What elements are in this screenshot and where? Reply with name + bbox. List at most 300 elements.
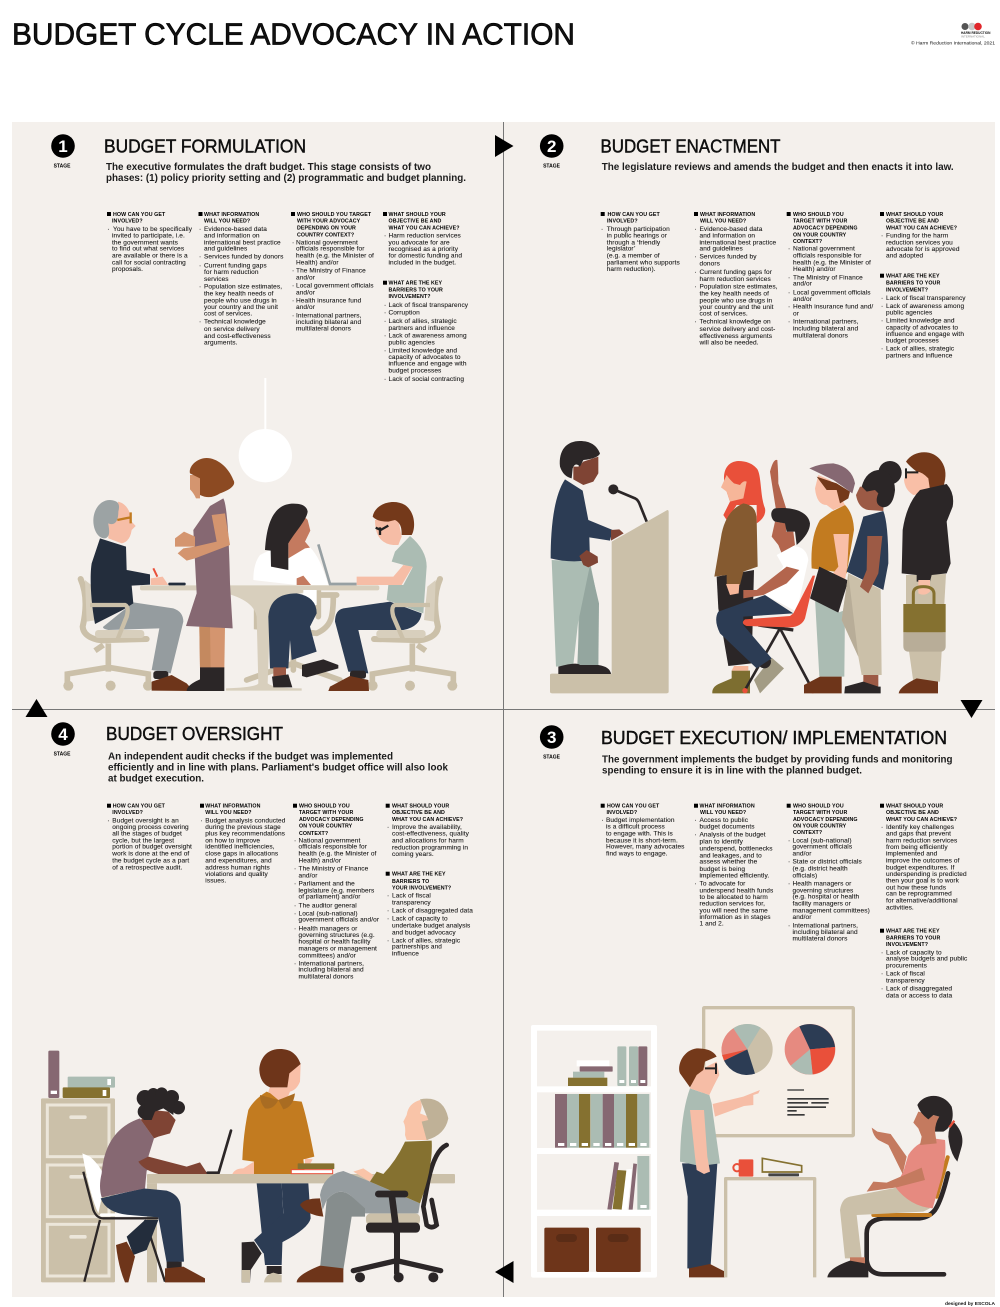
- column: objective and barriers: ·: [881, 950, 883, 957]
- column: who should you target: or: [793, 310, 800, 317]
- intro text: at budget execution.: [108, 773, 204, 784]
- column: how can you get involved: However, many advocates: [606, 844, 685, 851]
- column: who should you target: [291, 212, 374, 333]
- column: objective and barriers: Lack of fiscal transparency: [388, 302, 469, 309]
- column: who should you target: COUNTRY CONTEXT?: [297, 232, 354, 238]
- column: who should you target: governing structures (e.g.: [298, 932, 375, 939]
- books on table: [291, 1163, 334, 1174]
- column: objective and barriers: and gaps that prevent: [886, 831, 951, 838]
- column: objective and barriers: influence and engage with: [886, 331, 964, 338]
- column: objective and barriers: Lack of allies, strategic: [392, 938, 461, 945]
- laptop: [318, 544, 357, 584]
- column: what information: ·: [694, 284, 697, 291]
- column: what information: WILL YOU NEED?: [205, 810, 252, 816]
- column: who should you target: ·: [788, 859, 790, 866]
- column: objective and barriers: for domestic funding and: [388, 253, 462, 260]
- column: objective and barriers: reduction programming in: [392, 845, 468, 852]
- column: objective and barriers: WHAT SHOULD YOUR: [392, 804, 449, 810]
- column: what information: Technical knowledge: [204, 319, 266, 326]
- column: who should you target: management committees): [792, 908, 870, 915]
- column: who should you target: International partners,: [793, 319, 859, 326]
- column: objective and barriers: ·: [387, 916, 389, 923]
- column: who should you target: including bilateral and: [792, 929, 858, 936]
- column: how can you get involved: to find out what services: [112, 246, 185, 253]
- column: who should you target: Local government officials: [296, 283, 374, 290]
- column: objective and barriers: from being efficiently: [886, 844, 948, 851]
- column: objective and barriers: [383, 212, 469, 383]
- column: who should you target: CONTEXT?: [299, 831, 328, 837]
- column: who should you target: Health) and/or: [296, 260, 339, 267]
- chair armrest overlay: [392, 605, 430, 640]
- column: who should you target: National government: [296, 240, 358, 247]
- column: what information: reduction services for,: [700, 901, 765, 908]
- column: objective and barriers: OBJECTIVE BE AND: [886, 219, 939, 225]
- person: seated woman with ponytail: [827, 1096, 962, 1277]
- middle chair: [247, 590, 340, 680]
- stage 3 badge: STAGE: [543, 754, 561, 760]
- column: how can you get involved: ·: [107, 818, 110, 825]
- column: what information: international best practice: [204, 239, 281, 246]
- column: who should you target: officials responsible for: [793, 253, 862, 260]
- column: what information: your country and the unit: [700, 304, 774, 311]
- column: objective and barriers: INVOLVEMENT?: [388, 294, 431, 300]
- column: who should you target: ON YOUR COUNTRY: [793, 824, 847, 830]
- column: objective and barriers: for alternative/additional: [886, 898, 958, 905]
- podium: [550, 510, 669, 693]
- column: who should you target: ·: [294, 911, 296, 918]
- right chair: [368, 579, 457, 691]
- column: objective and barriers: coming years.: [392, 851, 434, 858]
- column: who should you target: ·: [788, 246, 790, 253]
- column: objective and barriers: Lack of fiscal: [392, 893, 431, 900]
- column: objective and barriers: WHAT ARE THE KEY: [388, 281, 443, 287]
- column: what information: ·: [199, 254, 201, 261]
- column: objective and barriers: partners and influence: [388, 325, 455, 332]
- column: what information: violations and quality: [205, 871, 268, 878]
- column: objective and barriers: Lack of social contracting: [388, 376, 464, 383]
- heading: BUDGET OVERSIGHT: [106, 724, 283, 744]
- column: what information: implemented efficiently.: [700, 873, 769, 880]
- column: objective and barriers: ·: [881, 824, 883, 831]
- column: objective and barriers: and adopted: [886, 253, 924, 260]
- column: objective and barriers: can be reprogrammed: [886, 891, 952, 898]
- column: objective and barriers: Identify key challenges: [886, 824, 955, 831]
- column: who should you target: Health managers or: [792, 881, 852, 888]
- column: what information: 1 and 2.: [700, 921, 724, 928]
- column: who should you target: CONTEXT?: [793, 830, 822, 836]
- column: who should you target: health (e.g. the Minister of: [298, 851, 377, 858]
- column: objective and barriers: ·: [384, 376, 386, 383]
- illustration: public hearing with legislators and advocates: [550, 441, 953, 693]
- column: how can you get involved: to engage with. This is: [606, 831, 674, 838]
- logo and copyright: HARM REDUCTION: [961, 31, 991, 35]
- column: what information: people who use drugs in: [700, 297, 773, 304]
- column: objective and barriers: ·: [387, 824, 389, 831]
- column: what information: WHAT INFORMATION: [700, 804, 755, 810]
- person: curly-haired man at laptop: [100, 1087, 208, 1282]
- column: objective and barriers: underspending is predicted: [886, 871, 967, 878]
- storage boxes: [544, 1228, 641, 1272]
- column: objective and barriers: WHAT YOU CAN ACHIEVE?: [886, 226, 957, 232]
- column: objective and barriers: ·: [881, 971, 883, 978]
- person: man in hoodie with bag: [899, 452, 953, 693]
- column: objective and barriers: WHAT ARE THE KEY: [886, 274, 940, 280]
- column: how can you get involved: [601, 212, 680, 273]
- column: who should you target: and/or: [296, 304, 316, 311]
- column: who should you target: Local (sub-national): [298, 911, 358, 918]
- column: who should you target: Health insurance fund: [296, 298, 362, 305]
- column: who should you target: and/or: [792, 851, 812, 858]
- column: objective and barriers: WHAT SHOULD YOUR: [388, 212, 446, 218]
- column: objective and barriers: WHAT SHOULD YOUR: [886, 212, 943, 218]
- column: objective and barriers: YOUR INVOLVEMENT?: [392, 886, 451, 892]
- column: who should you target: National government: [298, 838, 360, 845]
- column: who should you target: ·: [294, 961, 296, 968]
- column: how can you get involved: parliament who supports: [607, 259, 680, 266]
- column: how can you get involved: Budget oversight is an: [112, 818, 179, 825]
- column: what information: arguments.: [204, 339, 238, 346]
- column: what information: and information on: [204, 233, 260, 240]
- column: objective and barriers: implemented and: [886, 851, 938, 858]
- column: objective and barriers: harm reduction services: [886, 838, 958, 845]
- column: what information: ·: [199, 263, 201, 270]
- column: what information: and guidelines: [204, 246, 248, 253]
- column: who should you target: Health) and/or: [298, 858, 342, 865]
- column: what information: Current funding gaps for: [700, 269, 773, 276]
- arrow: stage 4 to 1: [26, 699, 48, 717]
- column: how can you get involved: all the stages of budget: [112, 831, 182, 838]
- column: objective and barriers: ·: [384, 348, 386, 355]
- column: how can you get involved: cycle, but the largest: [112, 838, 174, 845]
- arrow: stage 2 to 3: [960, 700, 982, 718]
- whiteboard with pie charts: [704, 1008, 853, 1136]
- column: how can you get involved: in public hearings or: [607, 233, 668, 240]
- illustration: oversight desk scene: [41, 1049, 455, 1282]
- column: what information: the key health needs of: [204, 291, 274, 298]
- left chair: [63, 579, 153, 691]
- column: who should you target: TARGET WITH YOUR: [793, 810, 847, 816]
- column: what information: issues.: [205, 878, 226, 885]
- column: objective and barriers: BARRIERS TO YOUR: [388, 287, 443, 293]
- column: what information: [198, 212, 284, 346]
- column: objective and barriers: transparency: [392, 900, 431, 907]
- person: man with grey hair: [91, 500, 191, 691]
- intro text: The legislature reviews and amends the budget and then enacts it into law.: [602, 162, 954, 173]
- column: who should you target: Local (sub-national): [792, 838, 852, 845]
- column: objective and barriers: Lack of capacity to: [392, 916, 448, 923]
- column: what information: service delivery and cost-: [700, 326, 775, 333]
- column: what information: Services funded by: [700, 254, 757, 261]
- column: who should you target: of parliament) and/or: [298, 894, 361, 901]
- bookshelf: [531, 1025, 657, 1278]
- column: what information: ·: [200, 818, 203, 825]
- column: objective and barriers: [880, 804, 968, 1000]
- folder on desk: [762, 1158, 802, 1176]
- column: who should you target: WHO SHOULD YOU TARGET: [297, 212, 372, 218]
- column: who should you target: and/or: [296, 275, 316, 282]
- illustration: team meeting around a table: [63, 378, 457, 691]
- stage 2 badge: STAGE: [543, 164, 561, 170]
- column: objective and barriers: Lack of awareness among: [388, 333, 467, 340]
- column: what information: ·: [694, 319, 697, 326]
- column: what information: ·: [199, 284, 201, 291]
- column: what information: for harm reduction: [204, 269, 259, 276]
- column: who should you target: and/or: [298, 873, 318, 880]
- column: who should you target: ·: [294, 903, 296, 910]
- column: objective and barriers: ·: [384, 310, 386, 317]
- column: how can you get involved: invited to participate, i.e.: [112, 233, 185, 240]
- column: what information: on how to improve: [205, 838, 260, 845]
- laptop: [208, 1131, 231, 1173]
- column: who should you target: including bilateral and: [793, 326, 858, 333]
- chair: white shell: [82, 1153, 165, 1282]
- column: what information: ·: [199, 319, 201, 326]
- column: who should you target: multilateral donors: [792, 936, 848, 943]
- column: what information: during the previous stage: [205, 824, 281, 831]
- desk: [726, 1179, 815, 1277]
- arrow: stage 3 to 4: [495, 1261, 514, 1283]
- column: who should you target: ·: [294, 838, 296, 845]
- books row 2: [555, 1094, 649, 1148]
- panel: budget formulation: [51, 134, 469, 383]
- column: objective and barriers: WHAT ARE THE KEY: [886, 929, 940, 935]
- column: objective and barriers: activities.: [886, 905, 914, 912]
- column: objective and barriers: BARRIERS TO: [392, 879, 429, 885]
- column: objective and barriers: budget expenditures. If: [886, 865, 955, 872]
- column: what information: underspend, bottlenecks: [700, 846, 773, 853]
- column: how can you get involved: Through participation: [607, 226, 670, 233]
- column: what information: underspend health funds: [700, 888, 774, 895]
- column: how can you get involved: find ways to engage.: [606, 851, 668, 858]
- column: who should you target: officials): [792, 873, 817, 880]
- column: who should you target: [787, 212, 873, 340]
- panel: budget oversight: [51, 722, 473, 981]
- column: who should you target: WHO SHOULD YOU: [793, 212, 844, 218]
- column: objective and barriers: budget processes: [388, 368, 442, 375]
- column: objective and barriers: then your goal is to work: [886, 878, 960, 885]
- arrow: stage 1 to 2: [495, 135, 514, 157]
- column: objective and barriers: ·: [387, 908, 389, 915]
- column: objective and barriers: reduction services you: [886, 239, 953, 246]
- column: who should you target: health (e.g. the Minister of: [793, 260, 871, 267]
- column: what information: ·: [199, 226, 201, 233]
- column: who should you target: and/or: [792, 914, 812, 921]
- person: woman with long dark hair: [253, 504, 338, 687]
- column: what information: Current funding gaps: [204, 263, 267, 270]
- intro text: efficiently and in line with plans. Parliament's budget office will also look: [108, 762, 448, 773]
- column: who should you target: legislature (e.g. members: [298, 888, 375, 895]
- column: who should you target: Local government officials: [793, 290, 871, 297]
- column: what information: to be allocated to harm: [700, 894, 768, 901]
- column: how can you get involved: are available or there is a: [112, 252, 188, 260]
- column: who should you target: Health) and/or: [793, 266, 836, 273]
- column: what information: information as in stages: [700, 914, 771, 921]
- column: what information: and cost-effectiveness: [204, 333, 271, 340]
- column: objective and barriers: cost-effectiveness, quality: [392, 831, 470, 838]
- column: what information: WHAT INFORMATION: [204, 212, 259, 218]
- column: objective and barriers: transparency: [886, 978, 925, 985]
- column: what information: Budget analysis conducted: [205, 818, 286, 825]
- column: who should you target: TARGET WITH YOUR: [299, 810, 353, 816]
- column: objective and barriers: partnerships and: [392, 944, 442, 951]
- column: objective and barriers: [880, 212, 966, 360]
- intro text: [106, 162, 466, 184]
- column: what information: ·: [694, 881, 697, 888]
- column: who should you target: ON YOUR COUNTRY: [793, 232, 847, 238]
- column: objective and barriers: Lack of allies, strategic: [886, 346, 955, 353]
- column: who should you target: hospital or health facility: [298, 939, 371, 946]
- column: objective and barriers: improve the outcomes of: [886, 858, 960, 865]
- column: how can you get involved: is a difficult process: [606, 824, 665, 831]
- intro text: [602, 754, 952, 776]
- column: what information: [200, 804, 286, 885]
- column: who should you target: and/or: [793, 281, 813, 288]
- column: objective and barriers: ·: [384, 302, 386, 309]
- column: objective and barriers: Lack of disaggregated data: [392, 908, 473, 915]
- column: what information: you will need the same: [700, 908, 768, 915]
- column: objective and barriers: undertake budget analysis: [392, 923, 471, 930]
- stage 2 badge: [540, 134, 564, 170]
- column: what information: and leakages, and to: [700, 853, 762, 860]
- column: who should you target: WHO SHOULD YOU: [793, 804, 844, 810]
- column: who should you target: health (e.g. the Minister of: [296, 253, 374, 260]
- stage 3 badge: [540, 725, 564, 760]
- column: objective and barriers: public agencies: [886, 310, 933, 317]
- column: what information: identified inefficiencies,: [205, 844, 275, 851]
- column: who should you target: WITH YOUR ADVOCACY: [297, 219, 361, 225]
- column: who should you target: CONTEXT?: [793, 239, 822, 245]
- column: what information: harm reduction services: [700, 276, 771, 283]
- column: how can you get involved: Budget implementation: [606, 817, 675, 824]
- stage 4 badge: STAGE: [54, 751, 71, 757]
- column: how can you get involved: ·: [107, 226, 110, 233]
- column: what information: and expenditures, and: [205, 858, 272, 865]
- column: who should you target: including bilateral and: [298, 967, 364, 974]
- column: who should you target: International partners,: [298, 961, 364, 968]
- heading: BUDGET EXECUTION/ IMPLEMENTATION: [601, 728, 947, 748]
- column: objective and barriers: ·: [387, 893, 389, 900]
- column: who should you target: multilateral donors: [793, 333, 849, 340]
- column: objective and barriers: influence and engage with: [388, 361, 467, 368]
- column: what information: your country and the unit: [204, 304, 278, 311]
- column: objective and barriers: WHAT ARE THE KEY: [392, 872, 446, 878]
- office chair: [353, 1145, 447, 1282]
- column: objective and barriers: and allocations for harm: [392, 838, 464, 845]
- column: who should you target: ·: [292, 312, 294, 319]
- column: how can you get involved: of a retrospective audit.: [112, 865, 182, 872]
- column: objective and barriers: procurements: [886, 963, 928, 970]
- intro text: The executive formulates the draft budget. This stage consists of two: [106, 162, 431, 173]
- stage 1 badge: STAGE: [54, 164, 71, 170]
- column: who should you target: ADVOCACY DEPENDING: [793, 226, 858, 232]
- column: who should you target: [293, 804, 380, 981]
- column: who should you target: WHO SHOULD YOU: [299, 804, 350, 810]
- column: how can you get involved: ·: [602, 817, 604, 824]
- column: who should you target: ·: [294, 925, 296, 932]
- column: what information: ·: [694, 817, 697, 824]
- column: objective and barriers: ·: [881, 318, 883, 325]
- column: objective and barriers: data or access to data: [886, 993, 952, 1000]
- column: objective and barriers: Improve the availability,: [392, 824, 462, 831]
- intro text: An independent audit checks if the budget was implemented: [108, 751, 393, 762]
- column: objective and barriers: WHAT SHOULD YOUR: [886, 804, 943, 810]
- column: objective and barriers: and budget advocacy: [392, 930, 456, 937]
- column: objective and barriers: OBJECTIVE BE AND: [388, 219, 441, 225]
- column: who should you target: [787, 804, 870, 943]
- column: who should you target: ·: [788, 319, 790, 326]
- column: objective and barriers: public agencies: [388, 340, 435, 347]
- column: who should you target: ·: [292, 268, 294, 275]
- person: man in cap with clipboard: [804, 463, 855, 693]
- column: who should you target: facility managers or: [792, 901, 852, 908]
- intro text: [108, 751, 448, 784]
- column: who should you target: ADVOCACY DEPENDING: [793, 817, 858, 823]
- column: objective and barriers: Lack of allies, strategic: [388, 318, 457, 325]
- column: who should you target: and/or: [296, 290, 316, 297]
- column: who should you target: officials responsible for: [298, 844, 368, 851]
- column: objective and barriers: ·: [387, 938, 389, 945]
- designer credit: designed by ESCOLA: [945, 1301, 996, 1306]
- column: objective and barriers: ·: [881, 346, 883, 353]
- filing cabinet: [41, 1098, 115, 1282]
- column: who should you target: ·: [788, 923, 790, 930]
- column: who should you target: National government: [793, 246, 855, 253]
- column: what information: cost of services.: [700, 311, 748, 318]
- column: objective and barriers: ·: [881, 295, 883, 302]
- column: what information: Technical knowledge on: [700, 319, 771, 326]
- stage 3 badge: 3: [547, 728, 556, 747]
- column: who should you target: ON YOUR COUNTRY: [299, 824, 353, 830]
- column: objective and barriers: OBJECTIVE BE AND: [886, 810, 939, 816]
- column: who should you target: committees) and/or: [298, 953, 357, 960]
- column: who should you target: International partners,: [296, 312, 362, 319]
- column: what information: To advocate for: [700, 881, 746, 888]
- intro text: spending to ensure it is in line with the planned budget.: [602, 765, 862, 776]
- column: objective and barriers: Limited knowledge and: [388, 348, 457, 355]
- person: standing woman in dress: [175, 458, 234, 691]
- column: who should you target: ·: [292, 298, 294, 305]
- person: speaker at podium: [551, 441, 624, 674]
- column: who should you target: ·: [292, 240, 294, 247]
- coffee mug: [733, 1159, 753, 1177]
- pie chart right: [785, 1024, 835, 1075]
- heading: BUDGET ENACTMENT: [600, 136, 780, 156]
- column: objective and barriers: Funding for the harm: [886, 233, 948, 240]
- column: objective and barriers: Lack of awareness among: [886, 303, 964, 310]
- person: woman with hair bun: [842, 461, 902, 693]
- logo and copyright: INTERNATIONAL: [961, 34, 985, 38]
- column: what information: and guidelines: [700, 246, 743, 253]
- column: who should you target: ·: [788, 275, 790, 282]
- chart caption lines: [787, 1089, 829, 1116]
- column: who should you target: International partners,: [792, 923, 858, 930]
- column: what information: Evidence-based data: [700, 226, 763, 233]
- column: what information: close gaps in allocations: [205, 851, 279, 858]
- column: what information: plus key recommendations: [205, 831, 286, 838]
- column: what information: address human rights: [205, 865, 270, 872]
- column: objective and barriers: you advocate for are: [388, 239, 450, 246]
- column: what information: WHAT INFORMATION: [700, 212, 755, 218]
- column: objective and barriers: ·: [384, 333, 386, 340]
- column: objective and barriers: WHAT YOU CAN ACHIEVE?: [886, 817, 957, 823]
- column: what information: the key health needs of: [700, 291, 769, 298]
- column: what information: plan to identify: [700, 839, 744, 846]
- column: what information: Analysis of the budget: [700, 832, 766, 839]
- column: objective and barriers: analyse budgets and public: [886, 956, 968, 963]
- books row 1: [568, 1046, 647, 1086]
- column: how can you get involved: legislator’: [607, 246, 636, 253]
- column: who should you target: Health insurance fund and/: [793, 304, 873, 311]
